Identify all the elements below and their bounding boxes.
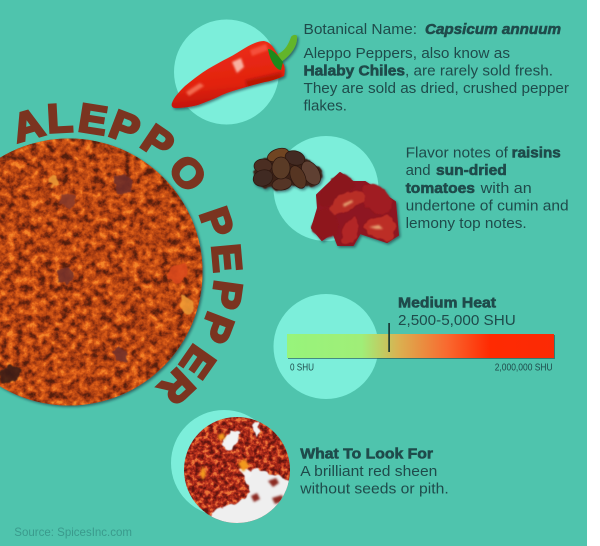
text: flavor notes: with an [480,180,532,197]
title: ALEPPO PEPPER curved text: E [171,337,224,386]
text: flavor notes: and [406,162,431,179]
text: flavor notes: raisins [512,145,561,162]
scale labels [290,362,553,374]
title: ALEPPO PEPPER curved text: P [191,307,243,349]
scale labels: 2,000,000 SHU [495,362,553,374]
title: ALEPPO PEPPER curved text: L [46,95,74,141]
text: medium heat: 2,500-5,000 SHU [398,312,516,329]
text: flavor notes: tomatoes [406,180,475,197]
text: what to look for [299,445,449,498]
text: flavor notes: sun-dried [436,162,507,179]
source line: Source: SpicesInc.com [14,525,132,539]
heat marker [388,323,390,352]
text: description: Halaby Chiles [304,63,405,80]
photo: flakes on white [184,417,294,528]
text: description: They are sold as dried, crushed pepper [304,80,569,97]
icon: raisins [251,146,324,192]
icon: red chili pepper [172,35,297,108]
title: ALEPPO PEPPER curved text [7,95,251,413]
icon: sun-dried tomatoes [312,173,398,245]
title: ALEPPO PEPPER curved text: P [134,116,182,169]
text: flavor notes [406,145,569,232]
text: description [304,45,569,115]
text: description: , are rarely sold fresh. [405,63,553,80]
text: what to look for: What To Look For [300,445,433,462]
accent circles [171,20,378,516]
text: botanical name: Botanical Name: [304,21,417,38]
text: medium heat: Medium Heat [398,295,496,312]
text: what to look for: A brilliant red sheen [300,463,437,480]
text: flavor notes: undertone of cumin and [406,198,569,215]
title: ALEPPO PEPPER curved text: R [150,360,203,413]
title: ALEPPO PEPPER curved text: A [7,100,49,151]
title: ALEPPO PEPPER curved text: O [160,146,215,200]
scale labels: 0 SHU [290,362,314,374]
heat scale bar [287,323,555,359]
text: what to look for: without seeds or pith. [299,481,449,498]
title: ALEPPO PEPPER curved text: P [202,278,251,312]
text: botanical name [304,21,561,38]
text: flavor notes: lemony top notes. [406,215,527,232]
text: flavor notes: Flavor notes of [406,145,509,162]
text: description: flakes. [304,98,347,115]
title: ALEPPO PEPPER curved text: P [104,101,146,153]
text: botanical name: Capsicum annuum [425,21,561,38]
title: ALEPPO PEPPER curved text: P [191,202,242,243]
crushed pepper flakes photo circle [0,135,205,410]
text: description: Aleppo Peppers, also know as [304,45,510,62]
text: medium heat [398,295,516,329]
title: ALEPPO PEPPER curved text: E [76,95,110,144]
title: ALEPPO PEPPER curved text: E [203,242,250,274]
